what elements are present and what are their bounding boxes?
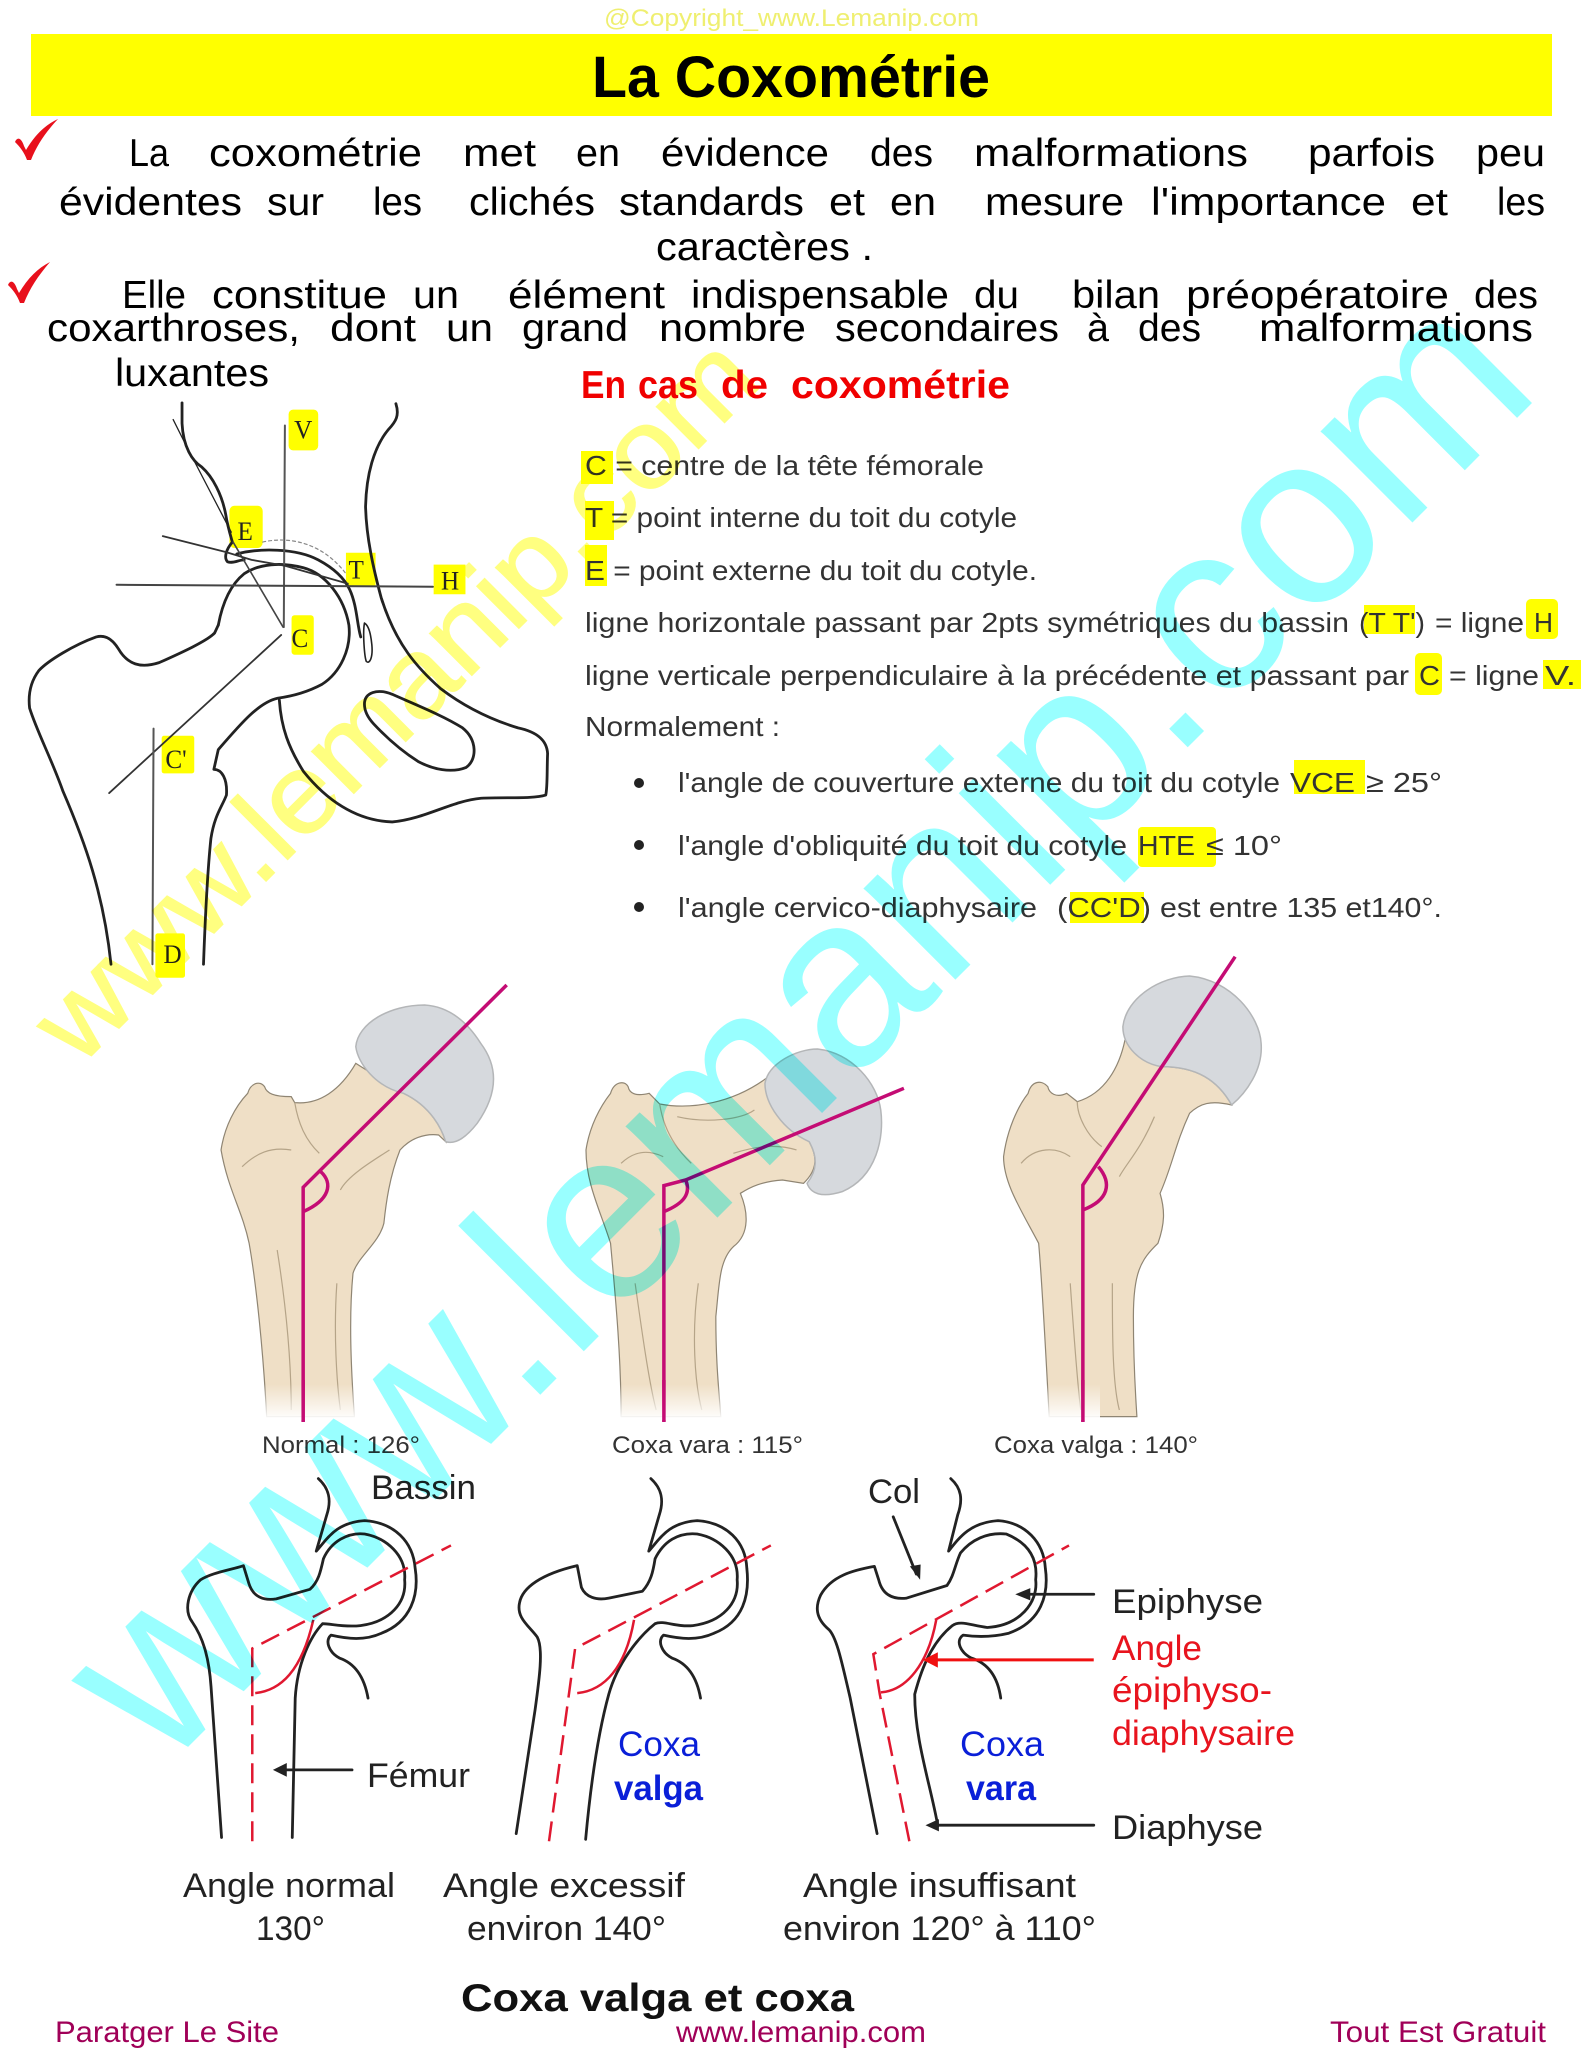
heading: en cas de coxométrie: de bbox=[721, 364, 768, 407]
intro paragraph 2: constitue bbox=[212, 274, 387, 317]
intro paragraph 1: La bbox=[129, 132, 169, 175]
intro paragraph 1: parfois bbox=[1308, 132, 1435, 175]
diagram anatomical labels: Diaphyse bbox=[1112, 1809, 1263, 1847]
intro paragraph 1: l'importance bbox=[1151, 181, 1386, 224]
line diagram: angle excessif bbox=[516, 1479, 771, 1841]
landmark letters: C bbox=[292, 623, 308, 653]
definition lines: (T T') bbox=[1359, 607, 1425, 638]
heading: en cas de coxométrie: coxométrie bbox=[791, 364, 1010, 407]
intro paragraph 2: à bbox=[1087, 307, 1109, 350]
intro paragraph 1: met bbox=[463, 132, 536, 175]
intro paragraph 1: caractères . bbox=[656, 226, 873, 269]
angle captions: environ 120° à 110° bbox=[783, 1910, 1096, 1948]
bullet list: l'angle cervico-diaphysaire bbox=[678, 892, 1037, 923]
bullet list: l'angle d'obliquité du toit du cotyle bbox=[678, 830, 1127, 861]
bullet list: (CC'D) bbox=[1057, 892, 1151, 923]
intro paragraph 2: un bbox=[413, 274, 459, 317]
intro paragraph 1: évidentes bbox=[59, 181, 242, 224]
intro paragraph 1: coxométrie bbox=[209, 132, 422, 175]
definition lines: ligne horizontale passant par 2pts symétriques du bassin bbox=[585, 607, 1349, 638]
blue labels: coxa valga, coxa vara: vara bbox=[966, 1769, 1037, 1808]
heading: en cas de coxométrie: cas bbox=[638, 364, 698, 407]
definition lines: C bbox=[1419, 660, 1440, 691]
intro paragraph 1 bbox=[59, 132, 1545, 269]
intro paragraph 1: clichés bbox=[469, 181, 595, 224]
intro paragraph 2: du bbox=[974, 274, 1019, 317]
definition lines: T = point interne du toit du cotyle bbox=[585, 502, 1017, 533]
intro paragraph 1: standards bbox=[619, 181, 804, 224]
intro paragraph 2: dont bbox=[330, 307, 416, 350]
intro paragraph 2: luxantes bbox=[115, 352, 269, 395]
intro paragraph 1: des bbox=[870, 132, 933, 175]
title banner bbox=[31, 34, 1552, 116]
blue labels: coxa valga, coxa vara: valga bbox=[614, 1769, 704, 1808]
blue labels: coxa valga, coxa vara bbox=[614, 1725, 1045, 1808]
definitions text block bbox=[581, 450, 1581, 923]
diagram anatomical labels: Col bbox=[868, 1473, 920, 1511]
intro paragraph 1: et bbox=[1411, 181, 1448, 224]
bullet list: est entre 135 et140°. bbox=[1160, 892, 1442, 923]
heading: en cas de coxométrie bbox=[581, 364, 1010, 407]
angle captions: Angle insuffisant bbox=[803, 1867, 1077, 1905]
intro paragraph 1: évidence bbox=[661, 132, 829, 175]
definition lines: = ligne bbox=[1435, 607, 1524, 638]
red label: angle épiphyso-diaphysaire bbox=[1112, 1629, 1295, 1753]
highlights bbox=[581, 451, 1581, 923]
femur captions bbox=[262, 1432, 1198, 1459]
hip diagram with landmarks bbox=[29, 403, 548, 978]
intro paragraph 1: malformations bbox=[974, 132, 1248, 175]
landmark letters: C' bbox=[165, 744, 187, 774]
bullet list: VCE bbox=[1290, 767, 1355, 798]
femur illustration: normal bbox=[221, 985, 507, 1422]
angle captions bbox=[183, 1867, 1096, 1948]
femur captions: Normal : 126° bbox=[262, 1432, 420, 1459]
diagram anatomical labels: Bassin bbox=[371, 1469, 476, 1507]
intro paragraph 2: coxarthroses, bbox=[47, 307, 300, 350]
definition lines: V. bbox=[1545, 660, 1576, 691]
footer links bbox=[55, 2016, 1546, 2048]
intro paragraph 2: un bbox=[446, 307, 493, 350]
definition lines: Normalement : bbox=[585, 711, 780, 742]
intro paragraph 1: les bbox=[1497, 181, 1545, 224]
copyright line: @Copyright_www.Lemanip.com bbox=[604, 5, 979, 32]
intro paragraph 2: nombre bbox=[659, 307, 806, 350]
landmark letters: E bbox=[238, 516, 253, 546]
angle captions: Angle normal bbox=[183, 1867, 395, 1905]
intro paragraph 1: en bbox=[576, 132, 620, 175]
reference lines V H E C D bbox=[109, 425, 433, 964]
intro paragraph 2: Elle bbox=[122, 274, 186, 317]
watermark: yellow: www.lemanip.com bbox=[7, 312, 780, 1086]
heading: en cas de coxométrie: En bbox=[581, 364, 626, 407]
femur captions: Coxa valga : 140° bbox=[994, 1432, 1198, 1459]
definition lines: C = centre de la tête fémorale bbox=[585, 450, 984, 481]
intro paragraph 1: et bbox=[829, 181, 865, 224]
angle captions: Angle excessif bbox=[443, 1867, 686, 1905]
definition lines: E = point externe du toit du cotyle. bbox=[585, 555, 1037, 586]
angle captions: environ 140° bbox=[467, 1910, 666, 1948]
red label: angle épiphyso-diaphysaire: Angle bbox=[1112, 1629, 1202, 1668]
femur axis lines, lower ends bbox=[303, 1380, 1083, 1422]
blue labels: coxa valga, coxa vara: Coxa bbox=[618, 1725, 701, 1764]
definition lines: = ligne bbox=[1449, 660, 1539, 691]
red label: angle épiphyso-diaphysaire: diaphysaire bbox=[1112, 1714, 1295, 1753]
femur bottom fade bbox=[200, 1384, 1100, 1420]
intro paragraph 2: malformations bbox=[1259, 307, 1533, 350]
icon: red check mark 1 bbox=[15, 119, 58, 160]
landmark letters bbox=[164, 415, 459, 969]
diagram title: Coxa valga et coxa bbox=[461, 1977, 854, 2020]
femur illustration: coxa vara bbox=[586, 1049, 904, 1422]
intro paragraph 2: secondaires bbox=[835, 307, 1059, 350]
intro paragraph 1: mesure bbox=[985, 181, 1124, 224]
watermark: cyan: www.lemanip.com bbox=[5, 235, 1580, 1809]
diagram anatomical labels: Fémur bbox=[367, 1757, 470, 1795]
bullet list: HTE bbox=[1138, 830, 1195, 861]
line diagram: angle normal bbox=[188, 1479, 451, 1841]
femur illustration: coxa valga bbox=[1004, 957, 1261, 1422]
intro paragraph 2: bilan bbox=[1072, 274, 1160, 317]
intro paragraph 2: élément bbox=[508, 274, 665, 317]
intro paragraph 2 bbox=[47, 274, 1538, 395]
bullet list bbox=[634, 767, 1442, 923]
intro paragraph 2: des bbox=[1138, 307, 1201, 350]
diagram anatomical labels bbox=[367, 1469, 1263, 1847]
angle captions: 130° bbox=[256, 1910, 325, 1948]
diagram anatomical labels: Epiphyse bbox=[1112, 1583, 1263, 1621]
red label: angle épiphyso-diaphysaire: épiphyso- bbox=[1112, 1671, 1272, 1710]
femur and pelvis outlines bbox=[29, 403, 548, 964]
intro paragraph 2: des bbox=[1474, 274, 1538, 317]
intro paragraph 1: les bbox=[373, 181, 422, 224]
bullet list: ≥ 25° bbox=[1366, 767, 1442, 798]
intro paragraph 2: indispensable bbox=[691, 274, 949, 317]
femur captions: Coxa vara : 115° bbox=[612, 1432, 803, 1459]
definition lines: ligne verticale perpendiculaire à la précédente et passant par bbox=[585, 660, 1409, 691]
blue labels: coxa valga, coxa vara: Coxa bbox=[960, 1725, 1045, 1764]
intro paragraph 1: en bbox=[890, 181, 936, 224]
bullet list: ≤ 10° bbox=[1206, 830, 1282, 861]
definition lines: H bbox=[1534, 607, 1553, 638]
landmark letters: D bbox=[164, 939, 182, 969]
bullet list: l'angle de couverture externe du toit du cotyle bbox=[678, 767, 1280, 798]
definition lines bbox=[585, 450, 1576, 742]
icon: red check mark 2 bbox=[8, 262, 50, 303]
label patches bbox=[155, 410, 465, 978]
landmark letters: H bbox=[441, 566, 459, 596]
landmark letters: V bbox=[294, 415, 313, 445]
intro paragraph 1: peu bbox=[1476, 132, 1545, 175]
title: La Coxométrie bbox=[592, 45, 990, 110]
intro paragraph 1: sur bbox=[267, 181, 324, 224]
intro paragraph 2: préopératoire bbox=[1186, 274, 1449, 317]
line diagram: angle insuffisant bbox=[817, 1479, 1094, 1841]
intro paragraph 2: grand bbox=[522, 307, 628, 350]
landmark letters: T bbox=[349, 555, 364, 585]
